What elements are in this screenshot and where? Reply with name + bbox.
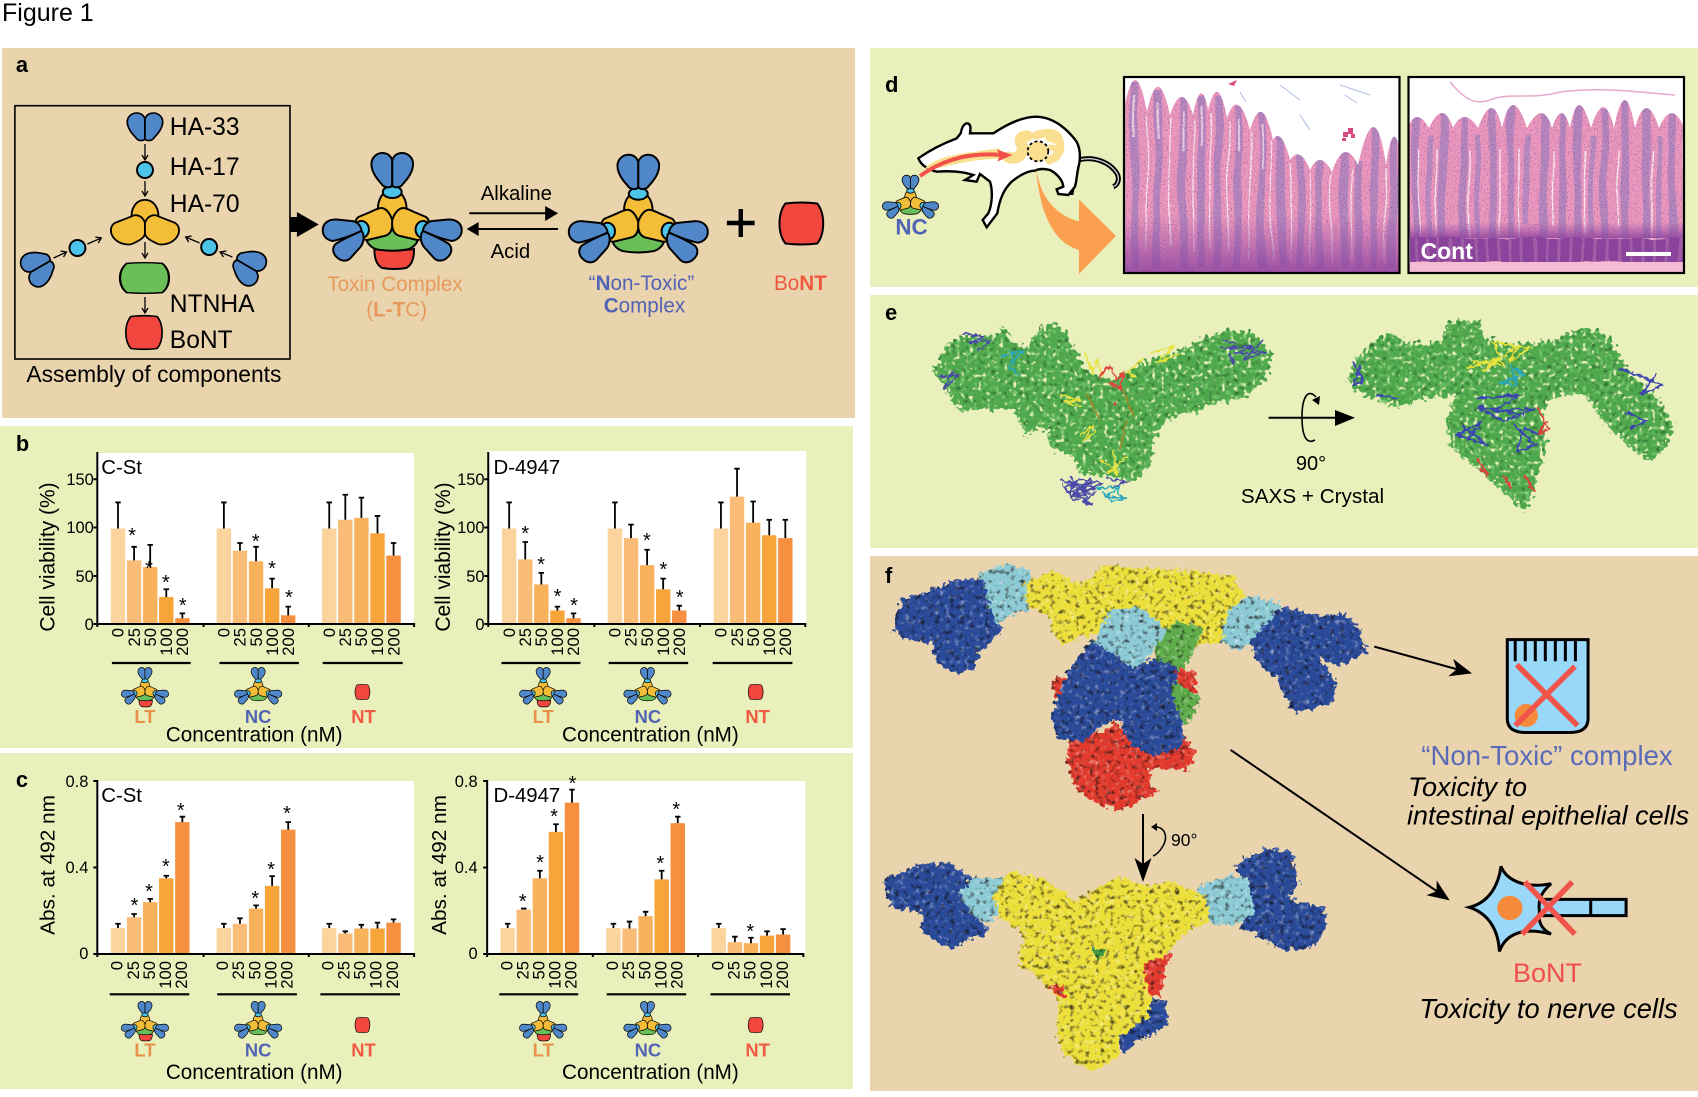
x tick labels: 0 [500,628,519,637]
x tick labels: 100 [546,961,565,989]
x tick labels: 100 [157,628,176,656]
x tick labels: 50 [635,961,654,979]
x tick labels: 25 [516,628,535,646]
x tick labels: 25 [231,628,250,646]
group labels: NT [351,706,376,727]
y tick labels: 0.8 [455,772,478,791]
label: assembly of components: Assembly of components [26,361,281,387]
y tick labels: 50 [76,567,94,586]
label: HA-33: HA-33 [170,114,240,141]
x tick labels: 0 [319,961,337,970]
x tick labels: 50 [140,961,159,979]
icon: left HA-17 [70,240,85,256]
text: toxicity to epithelial cells [1407,772,1689,831]
group labels: NC [245,706,271,727]
significance stars: * [268,558,276,580]
significance stars: * [659,559,667,581]
protein surface: rotated view [883,848,1325,1072]
significance stars: * [283,803,291,825]
significance stars: * [537,554,545,576]
group labels: NT [745,1039,771,1061]
group icons [121,1002,370,1041]
x tick labels: 0 [709,961,727,970]
x axis title: Concentration (nM) [166,723,343,747]
panel label c: c [16,767,28,792]
x tick labels: 50 [638,628,657,646]
label: NTNHA: NTNHA [170,291,255,318]
panel a: assembly of the toxin complex [2,48,855,418]
scale bar [1626,252,1671,256]
significance stars: * [519,891,527,913]
plus sign [727,209,755,237]
text: toxicity to epithelial cells: Toxicity to [1408,772,1527,802]
label: BoNT: BoNT [774,272,827,295]
x tick labels: 50 [352,628,371,646]
x tick labels: 200 [173,628,192,656]
micrograph frame [1124,77,1400,273]
x tick labels: 200 [773,961,792,989]
label: BoNT: BoNT [170,327,233,354]
x tick labels: 25 [124,961,143,979]
y tick labels: 0.4 [65,858,88,877]
micrograph: treated intestine [1124,77,1400,273]
y tick labels [455,772,478,963]
model: rotated view [1348,320,1673,512]
y tick labels: 0 [79,944,88,963]
icon: NC complex [882,175,938,218]
x tick labels: 200 [172,961,191,989]
x tick labels: 0 [109,628,128,637]
x tick labels: 50 [245,961,264,979]
significance stars: * [521,523,529,545]
group labels: LT [134,1039,156,1061]
assembly arrows [54,144,232,313]
label: HA-17: HA-17 [170,154,240,181]
x tick labels: 100 [651,961,670,989]
significance stars [521,523,684,617]
label: alkaline: Alkaline [481,183,552,205]
x tick labels: 50 [141,628,160,646]
significance stars: * [643,530,651,552]
significance stars: * [672,799,680,821]
y tick labels: 150 [66,470,94,489]
y tick labels: 100 [457,518,485,537]
x tick labels: 25 [622,628,641,646]
y tick labels: 0 [475,615,485,634]
x tick labels: 100 [760,628,779,656]
label: non-toxic complex: “Non-Toxic” complex [1421,740,1673,771]
panel label e: e [885,300,897,325]
x tick labels: 25 [725,961,744,979]
significance stars: * [570,595,578,617]
label: toxin complex: Toxin Complex [327,273,463,296]
x tick labels: 25 [728,628,747,646]
icon: BoNT [126,316,162,349]
icon: right HA-33 [227,244,270,289]
significance stars: * [251,888,259,910]
panel f: crystal structure and toxicity [870,556,1698,1091]
x tick labels: 200 [776,628,795,656]
panel e: SAXS and crystal model [870,295,1698,548]
arrow: rotation around axis [1269,394,1355,441]
micrograph: control intestine [1408,77,1684,273]
x tick labels: 100 [263,628,282,656]
group labels: NC [635,1039,661,1061]
significance stars: * [536,852,544,874]
text: toxicity to epithelial cells: intestinal epithelial cells [1407,801,1689,831]
group labels: NC [245,1039,271,1061]
label: L-TC: (L-TC) [366,298,427,322]
arrows: alkaline and acid [467,206,558,236]
group labels: NC [635,706,661,727]
x tick labels: 0 [497,961,516,970]
x tick labels: 0 [108,961,127,970]
significance stars: * [162,856,170,878]
icon: nerve cell [1469,866,1626,951]
icon: HA-17 [137,162,153,178]
significance stars: * [179,595,187,617]
icon: left HA-33 [17,245,60,290]
significance stars: * [569,773,577,795]
x tick labels: 0 [320,628,339,637]
significance stars: * [656,853,664,875]
label: NC: NC [895,214,928,239]
y axis title: Abs. at 492 nm [37,795,60,935]
icon: right HA-17 [201,239,217,255]
group labels [533,706,771,727]
x tick labels: 100 [757,961,776,989]
y axis title: Abs. at 492 nm [428,795,451,935]
box: assembly of components [15,106,290,359]
x tick labels: 50 [351,961,370,979]
x tick labels: 200 [564,628,583,656]
bar chart: C-St viability [37,452,415,747]
label: Cont: Cont [1420,238,1473,264]
x tick labels: 200 [277,961,296,989]
micrograph frame [1408,77,1684,273]
significance stars: * [676,587,684,609]
x tick labels: 100 [261,961,280,989]
x axis title: Concentration (nM) [562,723,739,747]
y axis title: Cell viability (%) [432,482,455,632]
panel label d: d [885,72,898,97]
icon: NTNHA [120,263,169,293]
x tick labels: 200 [384,628,403,656]
x tick labels: 0 [215,628,234,637]
x tick labels: 25 [336,628,355,646]
x tick labels: 200 [670,628,689,656]
significance stars: * [550,806,558,828]
panel c: absorbance [0,753,853,1089]
x tick labels: 0 [606,628,625,637]
label: acid: Acid [491,241,530,263]
x tick labels [500,628,795,656]
arrow: orange zoom arrow [1036,165,1116,274]
protein surface: top view [894,563,1367,811]
x tick labels: 25 [514,961,532,979]
x tick labels: 50 [532,628,551,646]
significance stars: * [131,895,139,917]
panel label b: b [16,431,29,456]
group labels [134,1039,376,1061]
text: toxicity to nerve cells: Toxicity to nerve cells [1419,993,1678,1024]
model: front view [933,322,1270,505]
panel label f: f [885,563,893,588]
y tick labels: 0.8 [65,772,88,791]
mouse illustration [918,117,1118,227]
label: 90 degrees: 90° [1296,453,1326,475]
group labels: LT [533,706,554,727]
significance stars [128,525,293,617]
bar chart: D-4947 viability [432,451,806,747]
x axis title: Concentration (nM) [562,1061,739,1084]
x tick labels: 50 [530,961,549,979]
x tick labels: 0 [213,961,232,970]
group labels: NT [351,1039,376,1061]
icon: HA-33 [127,113,163,141]
group labels: NT [745,706,771,727]
group icons [520,1002,763,1041]
x tick labels: 200 [562,961,581,989]
bar chart: C-St absorbance [37,772,415,1084]
x tick labels: 25 [125,628,144,646]
significance stars: * [145,558,153,580]
x tick labels: 200 [279,628,298,656]
significance stars: * [162,572,170,594]
y tick labels [66,470,94,634]
group labels: LT [134,706,156,727]
panel d: mouse and histology [870,48,1698,287]
panel label a: a [16,52,29,77]
significance stars: * [554,586,562,608]
strain label: C-St [101,457,142,479]
label: HA-70: HA-70 [170,191,240,218]
x tick labels [497,961,792,989]
significance stars: * [746,921,754,943]
significance stars: * [128,525,136,547]
significance stars [131,800,291,917]
label: non-toxic: “Non-Toxic” [589,272,694,295]
strain label: D-4947 [494,457,560,479]
y axis title: Cell viability (%) [37,482,60,632]
significance stars: * [145,881,153,903]
icon: non-toxic complex [569,155,708,262]
significance stars: * [285,587,293,609]
y tick labels: 100 [66,518,94,537]
y tick labels [457,470,485,634]
x tick labels: 100 [368,628,387,656]
strain label: C-St [101,785,142,807]
x tick labels: 0 [603,961,622,970]
x tick labels: 50 [744,628,763,646]
x tick labels: 200 [668,961,686,989]
strain label: D-4947 [494,785,560,807]
x tick labels: 0 [712,628,731,637]
arrow: assembly to complex [290,212,319,237]
icon: HA-70 [111,200,179,244]
significance stars: * [252,531,260,553]
y tick labels: 0.4 [455,858,478,877]
significance stars: * [177,800,185,822]
x tick labels [108,961,402,989]
arrow: to nerve cell [1231,750,1450,900]
label: SAXS + Crystal: SAXS + Crystal [1241,485,1384,508]
y tick labels: 150 [457,470,485,489]
y tick labels: 50 [466,567,485,586]
icon: BoNT [780,202,823,244]
y tick labels: 0 [85,615,94,634]
group icons [520,668,763,707]
x tick labels: 100 [548,628,567,656]
group labels: LT [533,1039,554,1061]
icon: epithelial cell [1507,640,1588,732]
x tick labels: 25 [619,961,638,979]
x tick labels: 25 [229,961,248,979]
x tick labels: 100 [156,961,175,989]
group labels [134,706,376,727]
x tick labels: 100 [367,961,386,989]
significance stars [519,773,754,943]
x axis title: Concentration (nM) [166,1061,343,1084]
group labels [533,1039,771,1061]
icon: toxin complex [323,153,462,269]
panel b: cell viability [0,426,853,748]
label: complex: Complex [604,294,686,318]
bar chart: D-4947 absorbance [428,772,805,1084]
label: BoNT: BoNT [1513,958,1582,988]
x tick labels: 25 [335,961,354,979]
arrow: rotation down [1134,814,1166,882]
x tick labels: 100 [654,628,673,656]
significance stars: * [267,859,275,881]
x tick labels [109,628,403,656]
y tick labels: 0 [468,944,478,963]
y tick labels [65,772,88,963]
x tick labels: 50 [247,628,266,646]
arrow: to epithelial cell [1374,647,1472,676]
group icons [121,668,370,707]
x tick labels: 50 [741,961,760,979]
x tick labels: 200 [383,961,402,989]
label: 90 degrees: 90° [1171,830,1197,850]
